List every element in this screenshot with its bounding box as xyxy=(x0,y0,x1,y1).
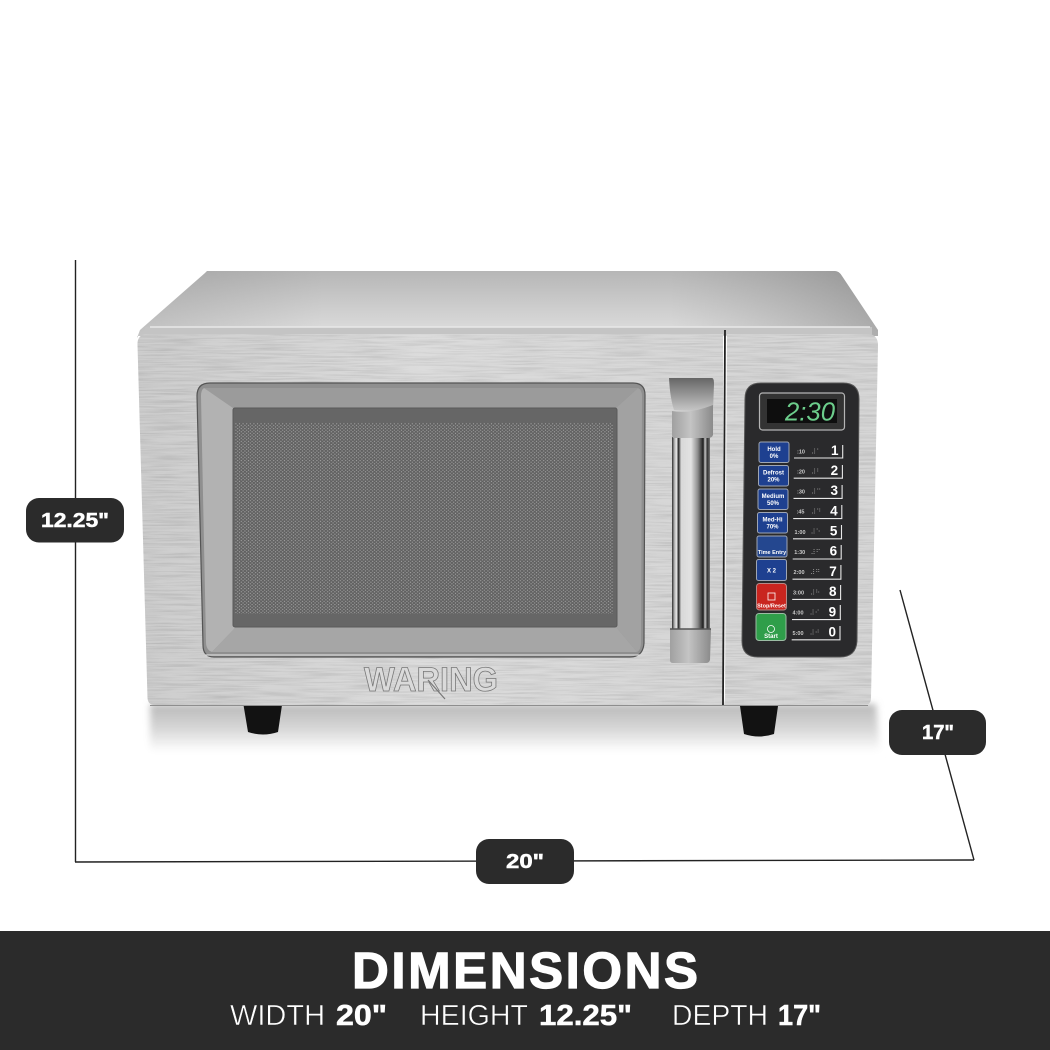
button: hold: Hold xyxy=(767,447,781,453)
floor shadow under microwave xyxy=(150,704,880,752)
digital display: 2:30 xyxy=(784,396,836,426)
depth dimension line xyxy=(900,590,974,860)
key 9: 9 xyxy=(829,604,836,619)
depth value xyxy=(672,1000,821,1032)
key 4: 4 xyxy=(830,504,838,518)
button: med-hi: 70% xyxy=(766,524,779,530)
right bevel xyxy=(616,388,642,652)
key 5: 5 xyxy=(830,524,838,538)
right foot xyxy=(740,706,778,736)
key 3: ⠼⠉ xyxy=(811,488,821,496)
key 4: :45 xyxy=(796,510,804,516)
key 0: 0 xyxy=(828,625,836,640)
key 0 xyxy=(792,625,840,640)
button: time entry: Time Entry xyxy=(758,550,787,556)
key 6 xyxy=(793,544,841,559)
key 3: 3 xyxy=(830,483,838,498)
mesh window xyxy=(233,408,617,627)
top surface xyxy=(137,271,878,338)
height value: HEIGHT xyxy=(420,1000,528,1032)
button: start: Start xyxy=(764,634,778,640)
door handle xyxy=(669,378,714,663)
width dimension line xyxy=(75,860,974,862)
key 9: 4:00 xyxy=(792,611,804,617)
panel face xyxy=(742,383,859,657)
key 2: ⠼⠃ xyxy=(811,468,821,476)
depth value: 17" xyxy=(778,1000,821,1032)
button: time entry xyxy=(757,536,787,557)
button: medium: 50% xyxy=(767,501,780,507)
key 3: :30 xyxy=(797,490,805,496)
top bevel xyxy=(204,388,638,408)
key 8: 8 xyxy=(829,584,837,599)
button: start xyxy=(756,614,786,640)
key 4 xyxy=(793,504,842,519)
key 7 xyxy=(792,564,841,579)
WARING logo: WARING xyxy=(364,661,498,699)
banner heading: DIMENSIONS xyxy=(352,942,698,999)
depth label pill xyxy=(889,710,986,755)
width value: 20" xyxy=(336,1000,387,1032)
button: med-hi xyxy=(758,512,788,533)
button: defrost: Defrost xyxy=(763,470,784,476)
key 7: 2:00 xyxy=(794,570,805,576)
door window frame xyxy=(197,383,645,657)
time and number keys xyxy=(792,443,843,640)
button: hold: 0% xyxy=(770,454,779,460)
button: x2 xyxy=(756,560,786,580)
handle bottom cap xyxy=(670,629,711,663)
digital display xyxy=(760,393,844,430)
width value: WIDTH xyxy=(230,1000,325,1032)
depth value: DEPTH xyxy=(672,1000,768,1032)
key 3 xyxy=(794,483,842,498)
control panel front xyxy=(725,334,878,705)
left foot xyxy=(244,705,282,734)
door front panel xyxy=(137,334,723,705)
key 1 xyxy=(794,443,843,458)
key 5: 1:00 xyxy=(794,530,806,536)
key 1: 1 xyxy=(831,443,839,458)
button: med-hi: Med-Hi xyxy=(762,518,783,524)
height value xyxy=(420,1000,632,1032)
key 5: ⠼⠑ xyxy=(810,528,821,536)
microwave oven xyxy=(137,271,878,736)
width label pill xyxy=(476,839,574,884)
width value xyxy=(230,1000,387,1032)
button: stop reset xyxy=(756,584,786,610)
key 6: 6 xyxy=(830,544,838,559)
key 4: ⠼⠙ xyxy=(811,508,821,516)
handle bar xyxy=(672,437,710,629)
key 8 xyxy=(792,584,841,599)
button: hold xyxy=(759,442,789,462)
key 9: ⠼⠊ xyxy=(810,609,820,617)
button: medium: Medium xyxy=(762,494,784,500)
height dimension line xyxy=(74,260,76,862)
mode buttons xyxy=(756,442,789,640)
key 6: 1:30 xyxy=(794,550,805,556)
button: stop reset: Stop/Reset xyxy=(757,604,786,610)
height value: 12.25" xyxy=(539,1000,632,1032)
control panel xyxy=(742,383,859,657)
left bevel xyxy=(201,388,236,652)
key 2: :20 xyxy=(797,470,805,476)
height label pill xyxy=(26,498,124,542)
key 1: :10 xyxy=(797,450,805,456)
key 7: ⠼⠛ xyxy=(810,568,820,576)
bottom bevel xyxy=(212,627,637,652)
key 2: 2 xyxy=(831,463,838,478)
width label pill: 20" xyxy=(506,851,544,873)
button: x2: X 2 xyxy=(767,568,777,574)
height label pill: 12.25" xyxy=(41,510,109,532)
button: defrost: 20% xyxy=(767,478,780,484)
button: defrost xyxy=(758,466,788,486)
button: medium xyxy=(758,489,788,510)
key 5 xyxy=(793,524,842,539)
key 7: 7 xyxy=(829,564,837,579)
key 8: ⠼⠓ xyxy=(810,589,820,597)
key 1: ⠼⠁ xyxy=(811,448,821,456)
key 6: ⠼⠋ xyxy=(810,548,821,556)
key 2 xyxy=(794,463,842,478)
key 0: ⠼⠚ xyxy=(810,629,820,637)
key 8: 3:00 xyxy=(793,590,804,596)
door seam xyxy=(723,330,725,705)
handle top cap xyxy=(669,378,714,410)
bottom edge highlight xyxy=(150,704,868,706)
dimensions banner xyxy=(0,931,1050,1050)
key 0: 5:00 xyxy=(792,631,804,637)
key 9 xyxy=(792,604,840,620)
depth label pill: 17" xyxy=(922,722,954,744)
